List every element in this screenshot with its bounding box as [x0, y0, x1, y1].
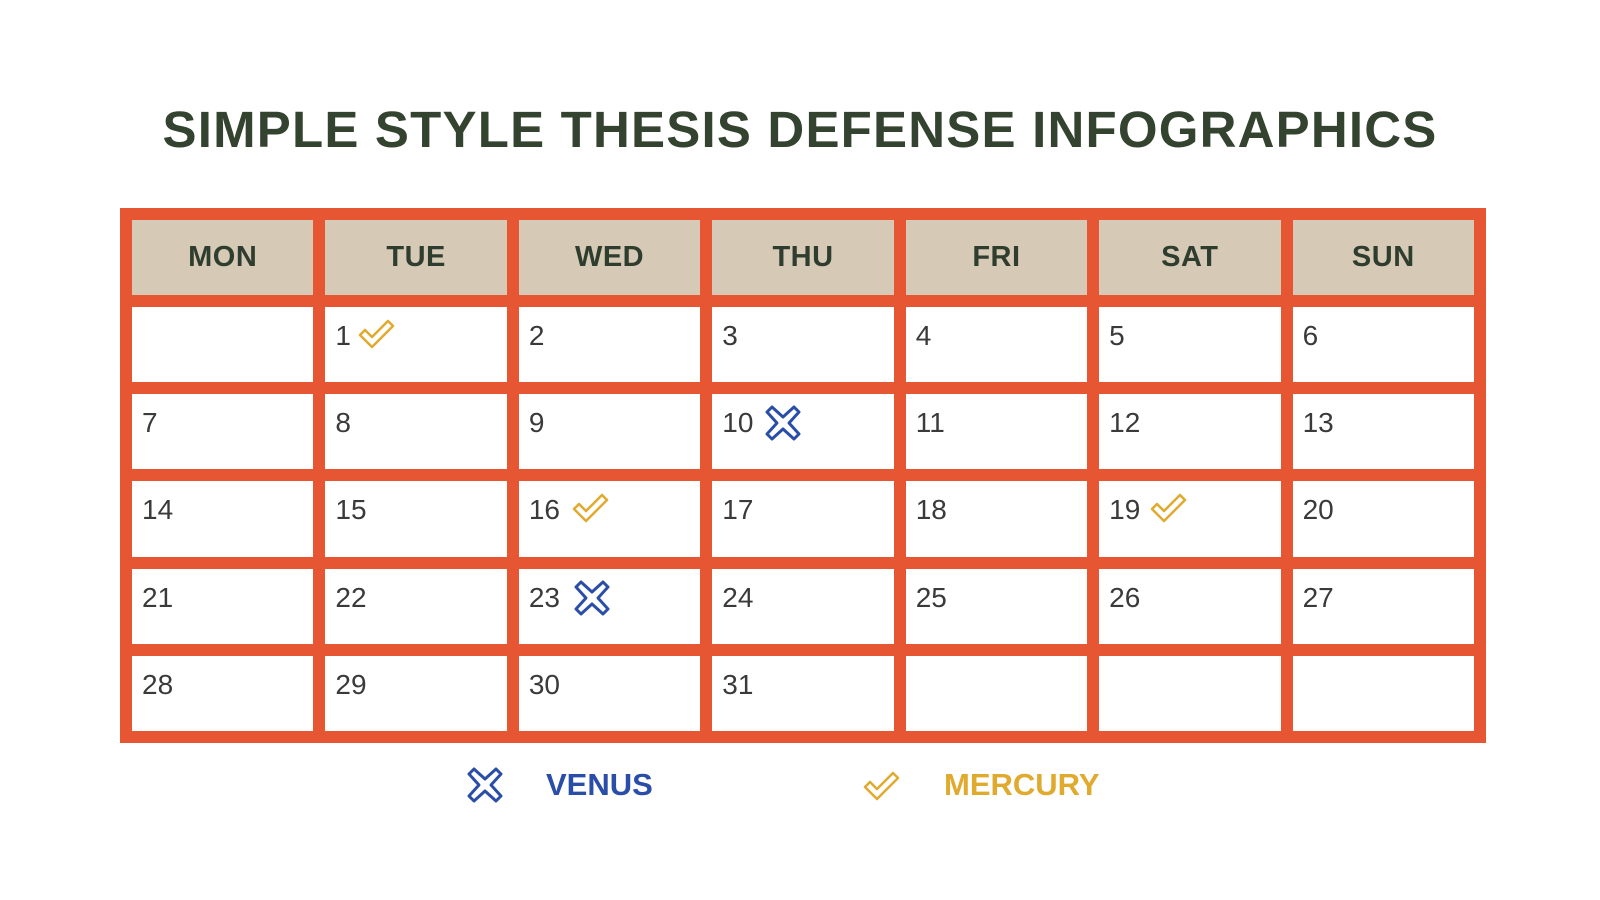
calendar grid: 18 [916, 494, 947, 525]
calendar grid: 31 [722, 669, 753, 700]
calendar grid: 19 [1109, 494, 1140, 525]
calendar grid: 26 [1109, 582, 1140, 613]
calendar grid: 14 [142, 494, 173, 525]
calendar grid: 15 [335, 494, 367, 525]
calendar grid: 13 [1303, 407, 1334, 438]
calendar grid: 3 [722, 320, 738, 351]
legend: venus: VENUS [546, 767, 653, 802]
calendar grid: SAT [1161, 241, 1219, 273]
calendar grid: MON [188, 241, 257, 273]
calendar grid: 1 [335, 320, 351, 351]
calendar grid: WED [575, 241, 644, 273]
title: SIMPLE STYLE THESIS DEFENSE INFOGRAPHICS [162, 101, 1438, 158]
calendar grid: 27 [1303, 582, 1334, 613]
calendar grid: 5 [1109, 320, 1125, 351]
calendar grid: 4 [916, 320, 931, 351]
calendar grid: 7 [142, 407, 158, 438]
icon: mercury legend [864, 772, 900, 800]
legend: mercury: MERCURY [944, 767, 1100, 802]
calendar grid: 20 [1303, 494, 1334, 525]
calendar grid: 29 [335, 669, 367, 700]
calendar grid: 11 [916, 407, 945, 438]
calendar grid: FRI [972, 241, 1021, 273]
calendar grid: 22 [335, 582, 367, 613]
calendar grid: TUE [386, 241, 446, 273]
calendar grid [120, 208, 1486, 743]
calendar grid: THU [772, 241, 834, 273]
calendar grid: 30 [529, 669, 560, 700]
calendar grid: 16 [529, 494, 560, 525]
calendar grid: 9 [529, 407, 544, 438]
calendar grid: 24 [722, 582, 753, 613]
calendar grid: 23 [529, 582, 560, 613]
calendar grid: 6 [1303, 320, 1318, 351]
calendar grid: 28 [142, 669, 173, 700]
calendar grid: 17 [722, 494, 753, 525]
calendar grid: 8 [335, 407, 351, 438]
calendar grid: SUN [1352, 241, 1415, 273]
calendar grid: 25 [916, 582, 947, 613]
icon: venus legend [467, 767, 503, 803]
calendar grid: 10 [722, 407, 753, 438]
calendar grid: 21 [142, 582, 173, 613]
calendar grid: 2 [529, 320, 544, 351]
calendar grid: 12 [1109, 407, 1140, 438]
